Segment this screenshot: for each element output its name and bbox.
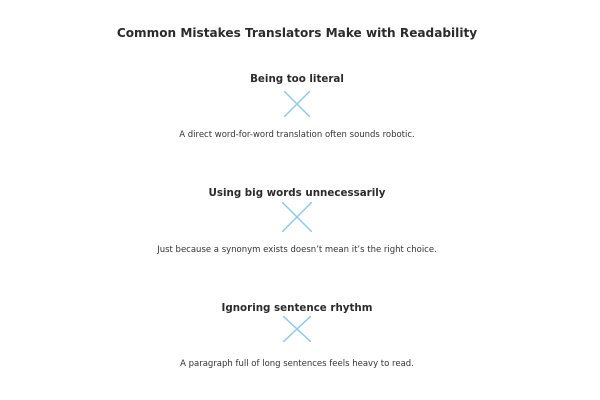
icon: x mark	[282, 202, 312, 232]
panel: using big words	[156, 187, 437, 255]
panel: being too literal	[179, 73, 415, 140]
icon: x mark	[284, 91, 310, 117]
text: Just because a synonym exists doesn’t mean it’s the right choice.	[157, 245, 437, 255]
title: Common Mistakes Translators Make with Readability	[117, 26, 477, 40]
text: A paragraph full of long sentences feels heavy to read.	[180, 359, 414, 369]
text: A direct word-for-word translation often sounds robotic.	[179, 130, 415, 140]
heading: Being too literal	[250, 73, 344, 85]
icon: x mark	[283, 316, 311, 342]
panel: ignoring sentence rhythm	[180, 302, 414, 369]
heading: Using big words unnecessarily	[208, 187, 386, 199]
heading: Ignoring sentence rhythm	[222, 302, 372, 314]
